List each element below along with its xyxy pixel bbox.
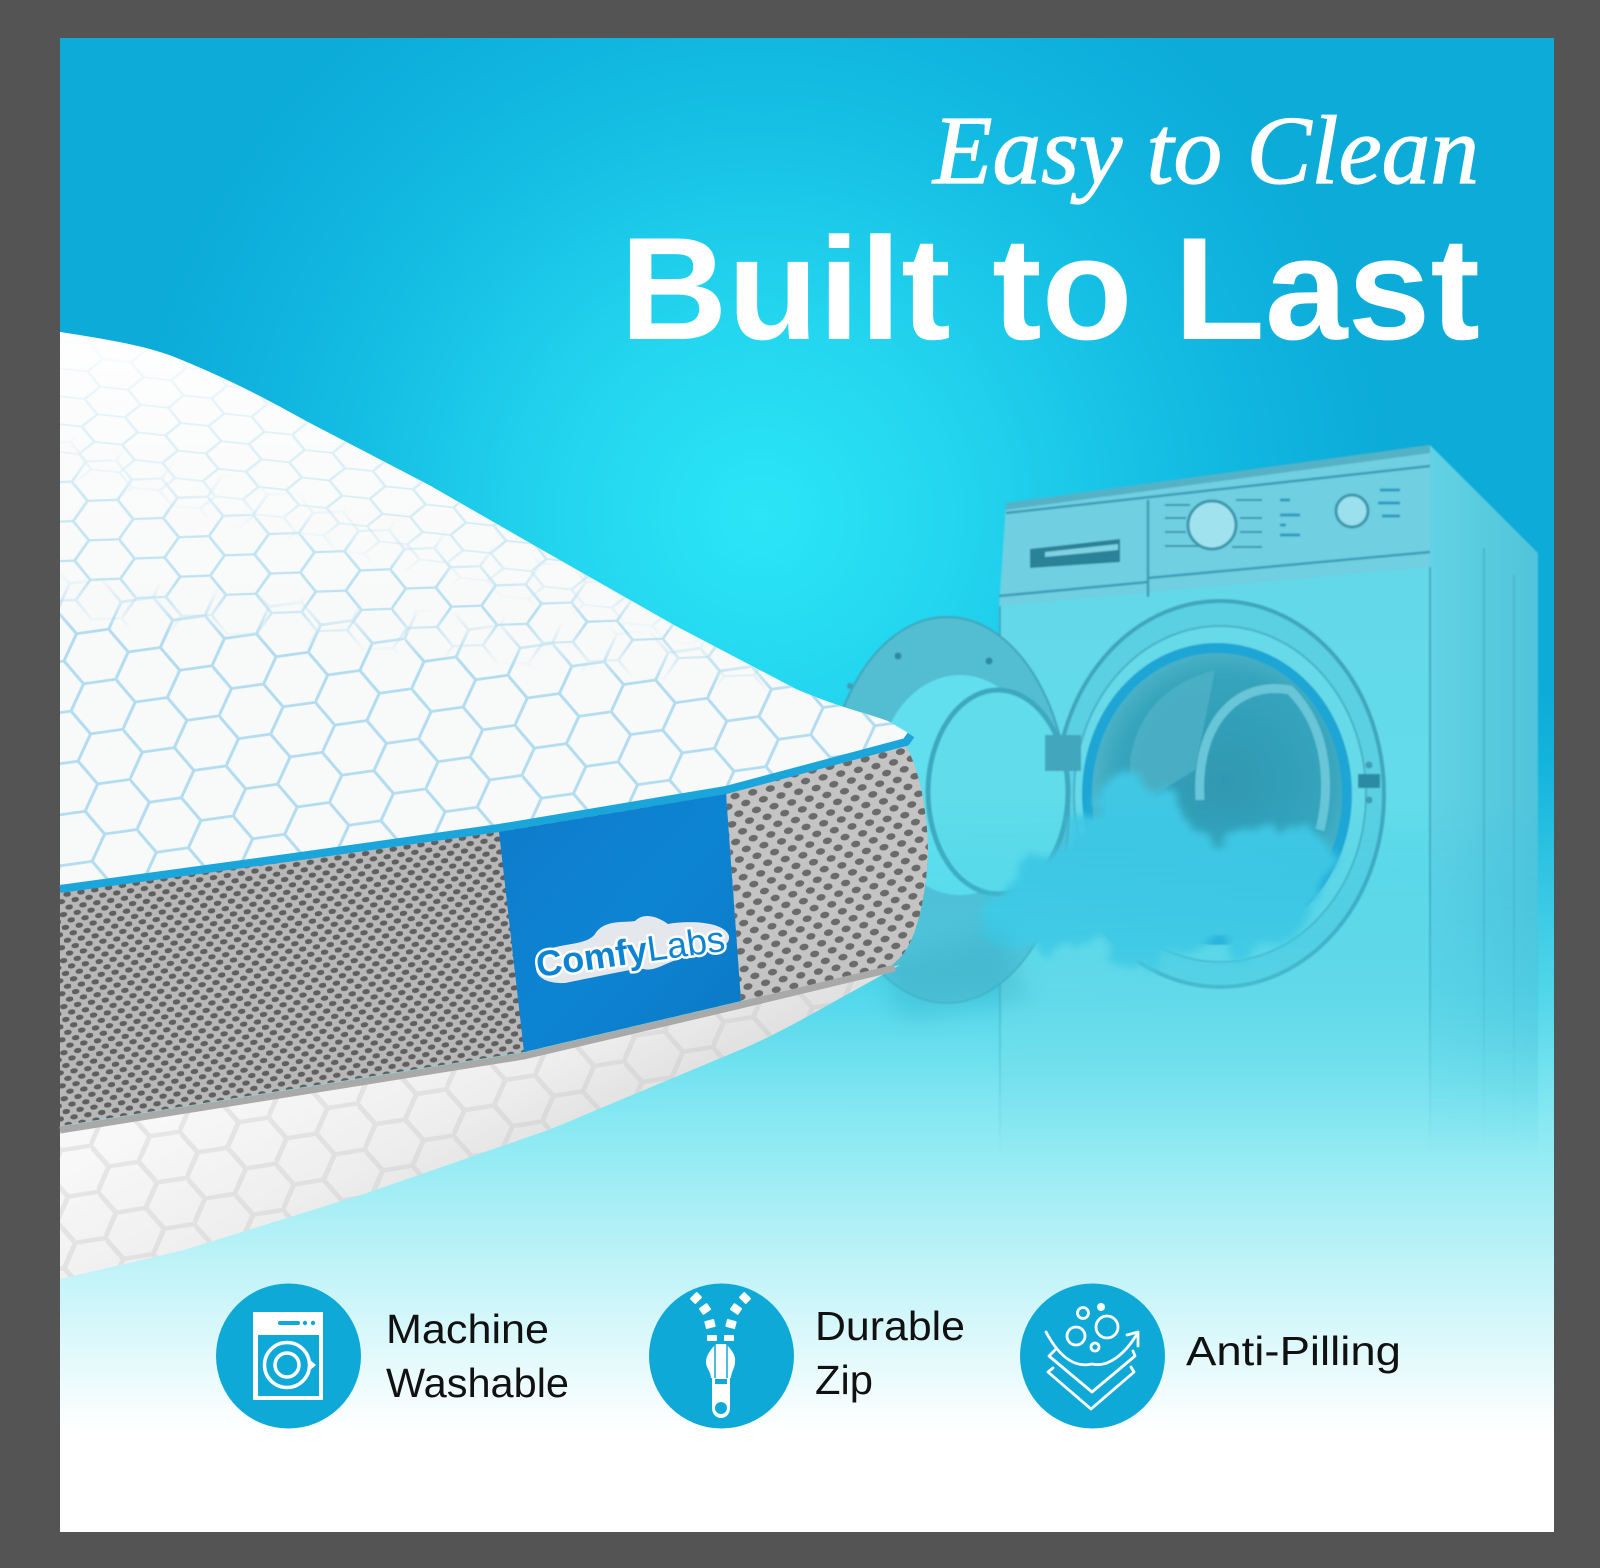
program dial [1188,501,1236,549]
washing machine illustration [825,445,1538,1176]
pillow [60,320,1030,1279]
feature: machine washable [216,1284,569,1428]
door seal outer ring [1056,601,1384,987]
feature: anti-pilling [1020,1284,1401,1428]
blue brand tab [499,794,741,1052]
logo wordmark: ComfyLabs [533,918,727,985]
blue top piping [60,735,911,889]
open door [825,617,1069,1003]
drum interior [1092,652,1343,934]
mesh side panel [60,746,928,1126]
bottom cushion [60,965,900,1279]
grey bottom piping [60,968,895,1130]
subtitle: easy to clean: Easy to Clean [931,97,1479,204]
feature: durable zip [649,1284,965,1428]
settings dial [1336,495,1368,527]
machine side panel [1430,445,1538,1170]
blue drum ring [1087,648,1347,940]
door latch [1358,762,1380,804]
headline: built to last: Built to Last [620,207,1480,370]
icon: zipper [649,1284,794,1428]
icon: washing machine [216,1284,361,1428]
pillow shadow [880,930,1030,1020]
logo cloud [536,916,729,983]
title [620,97,1480,370]
water foam [982,780,1332,969]
machine top control strip [999,445,1430,606]
icon: fabric layers with bubbles [1020,1284,1165,1428]
label: durable zip: Zip [815,1357,873,1403]
machine front body [1000,560,1430,1176]
quilted top with hexagon weave [60,320,920,900]
label: anti-pilling: Anti-Pilling [1186,1328,1401,1374]
label: machine washable: Machine [386,1306,549,1352]
detergent drawer slot [1030,539,1120,568]
door hinge [1045,735,1081,771]
label: machine washable: Washable [386,1360,569,1406]
label: durable zip: Durable [815,1303,965,1349]
